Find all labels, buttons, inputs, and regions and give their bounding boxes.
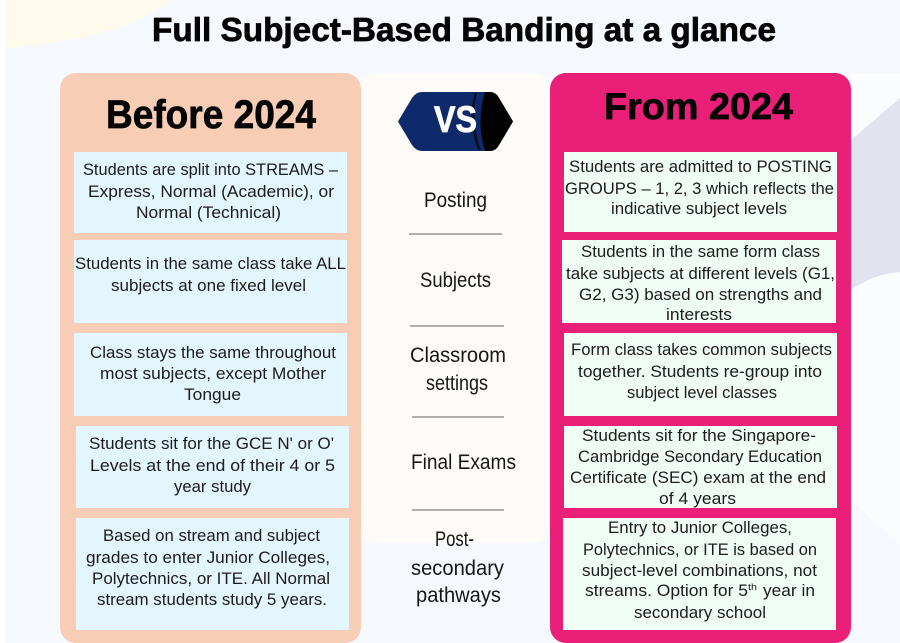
label: Classroom settings <box>410 343 506 395</box>
card: classroom from <box>564 333 837 416</box>
card: exams from: Certificate (SEC) exam at the end <box>570 468 826 487</box>
card: exams before: Students sit for the GCE N' or O' <box>89 434 334 453</box>
card: classroom from: Form class takes common subjects <box>571 340 832 359</box>
card: subjects before: Students in the same class take ALL <box>75 254 346 273</box>
card: subjects from <box>562 240 836 324</box>
label: Final Exams: Final Exams <box>411 450 516 474</box>
label: Post-secondary pathways: secondary <box>411 556 504 580</box>
card: posting before: Normal (Technical) <box>136 203 281 222</box>
card: exams from <box>564 426 837 508</box>
label: Post-secondary pathways: pathways <box>416 583 501 607</box>
card: pathways before <box>76 518 349 630</box>
card: subjects from: G2, G3) based on strengths and <box>579 285 822 304</box>
card: pathways from: Polytechnics, or ITE is based on <box>583 540 817 559</box>
vs letters: VS <box>434 99 477 140</box>
card: pathways before: grades to enter Junior Colleges, <box>86 548 330 567</box>
label: Posting: Posting <box>424 188 487 212</box>
card: classroom before: most subjects, except Mother <box>100 364 326 383</box>
card: pathways before: Based on stream and subject <box>103 526 320 545</box>
card: posting from: Students are admitted to POSTING <box>569 157 832 176</box>
card: pathways from: streams. Option for 5 <box>585 581 748 600</box>
card: subjects from: Students in the same form class <box>581 242 820 261</box>
card: pathways before: Polytechnics, or ITE. All Normal <box>92 569 330 588</box>
card: exams before: Levels at the end of their 4 or 5 <box>90 456 335 475</box>
label: Post-secondary pathways: Post- <box>435 527 474 551</box>
card: classroom from: together. Students re-group into <box>578 362 822 381</box>
icon: VS badge <box>398 92 513 151</box>
card: subjects before: subjects at one fixed level <box>111 276 306 295</box>
panel: comparison rows <box>361 73 550 607</box>
card: exams from: Students sit for the Singapore- <box>582 426 816 445</box>
card: classroom before: Class stays the same throughout <box>90 343 336 362</box>
card: posting before: Students are split into STREAMS – <box>83 160 339 179</box>
label: Post-secondary pathways <box>411 527 504 607</box>
card: subjects from: take subjects at different levels (G1, <box>566 264 835 283</box>
card: posting from: GROUPS – 1, 2, 3 which reflects the <box>565 179 834 198</box>
label: Classroom settings: settings <box>426 371 488 395</box>
card: subjects before <box>74 240 347 323</box>
card: classroom before: Tongue <box>184 385 241 404</box>
card: pathways from: Entry to Junior Colleges, <box>608 518 792 537</box>
card: exams before <box>76 426 349 508</box>
label: Subjects: Subjects <box>420 268 491 292</box>
card: pathways from: year in <box>763 581 815 600</box>
card: exams before: year study <box>174 477 251 496</box>
panel: From 2024 <box>550 73 851 643</box>
card: exams from: Cambridge Secondary Education <box>578 447 822 466</box>
card: pathways from: th <box>748 582 757 592</box>
card: pathways before: stream students study 5 years. <box>97 590 327 609</box>
card: posting from: indicative subject levels <box>611 199 787 218</box>
card: pathways from: secondary school <box>634 603 766 622</box>
card: exams from: of 4 years <box>659 489 736 508</box>
card: pathways from <box>563 518 836 630</box>
label: Classroom settings: Classroom <box>410 343 506 367</box>
heading: Before 2024: Before 2024 <box>106 93 317 137</box>
card: posting before <box>74 152 347 233</box>
panel: Before 2024 <box>60 73 361 643</box>
title: Full Subject-Based Banding at a glance <box>152 11 776 48</box>
card: subjects from: interests <box>666 305 732 324</box>
heading: From 2024: From 2024 <box>604 86 793 127</box>
card: classroom before <box>74 333 347 416</box>
card: posting before: Express, Normal (Academic), or <box>88 182 334 201</box>
card: posting from <box>564 152 837 232</box>
card: classroom from: subject level classes <box>627 383 777 402</box>
card: pathways from: subject-level combinations, not <box>582 561 817 580</box>
